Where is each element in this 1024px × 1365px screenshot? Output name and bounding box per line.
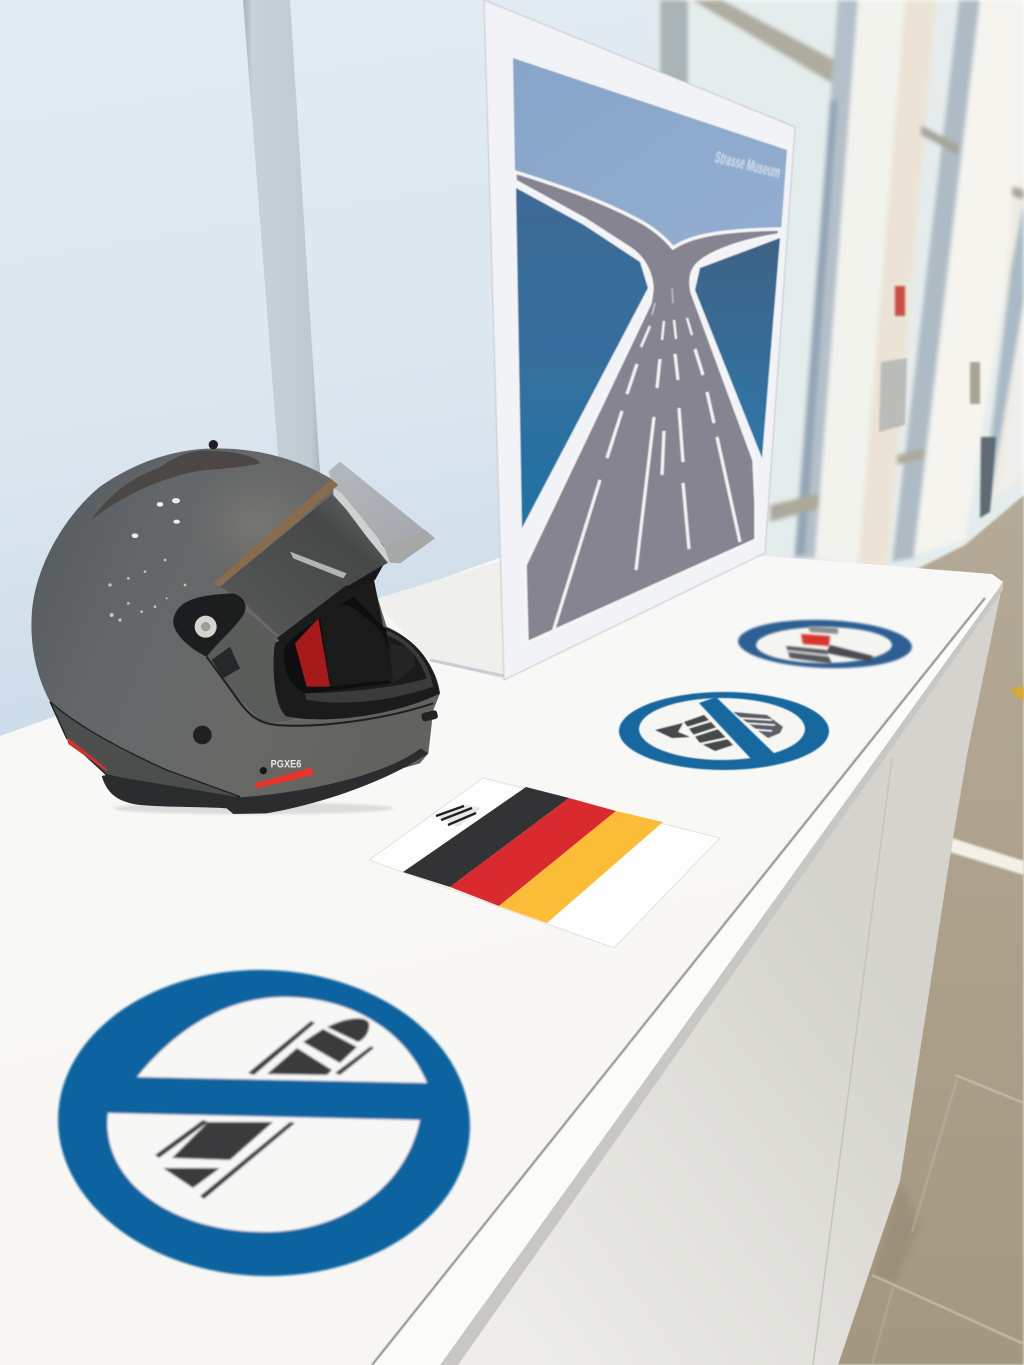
poster lane markings (553, 288, 740, 632)
helmet label: PGXE6 (271, 758, 301, 770)
helmet red lining (295, 618, 330, 687)
helmet label (254, 758, 313, 788)
helmet side vent (421, 710, 438, 722)
flag card logo (436, 804, 481, 827)
background: metal pillar (243, 0, 323, 520)
visor upper flap (328, 462, 435, 545)
sign upper icon (248, 1018, 374, 1075)
helmet black lining (320, 605, 390, 687)
poster right water (695, 238, 780, 458)
helmet shell (31, 448, 440, 807)
yellow stripe (499, 811, 663, 923)
helmet top vent (92, 451, 260, 519)
poster left water (516, 188, 648, 528)
middle sign bar (699, 697, 780, 762)
red stripe (450, 798, 616, 906)
table top (0, 556, 1003, 1365)
helmet faceplate (207, 612, 293, 723)
black stripe (403, 787, 569, 887)
large round sign (53, 963, 475, 1283)
flag card (369, 778, 720, 948)
poster caption: Strasse Museum (713, 147, 782, 182)
helmet shell highlight (190, 467, 323, 580)
poster: motorway artwork (484, 0, 795, 680)
helmet highlights (108, 498, 186, 622)
background: wall fittings (879, 286, 996, 518)
poster frame (484, 0, 795, 680)
helmet base (102, 748, 428, 814)
helmet shadow (113, 802, 393, 814)
far round sign (737, 617, 913, 671)
helmet rear reflector (67, 737, 107, 772)
helmet chin groove (207, 657, 433, 726)
poster base shadow (372, 560, 504, 680)
helmet screw (193, 726, 212, 744)
visor tan strip (213, 479, 338, 587)
background: corridor windows and columns (655, 0, 1024, 580)
helmet visor (213, 462, 435, 643)
helmet (31, 440, 440, 814)
table front side (450, 582, 1003, 1365)
sign upper white area (137, 997, 427, 1083)
visor smoked glass (220, 493, 390, 637)
sign ring (53, 963, 475, 1283)
sign lower white area (107, 1113, 420, 1232)
middle sign icon (655, 712, 783, 751)
helmet eye port (274, 577, 440, 719)
floor (820, 495, 1024, 1365)
sign lower icon (155, 1120, 295, 1199)
poster road (515, 172, 780, 643)
visor silver band (333, 487, 395, 563)
helmet chin rim (305, 630, 433, 703)
middle round sign (619, 692, 829, 770)
background: left wall (0, 0, 680, 760)
helmet lower band (50, 702, 240, 799)
visor lower strip (383, 530, 435, 563)
poster sky (513, 58, 787, 252)
helmet visor pivot (173, 593, 246, 678)
far sign icon (786, 626, 873, 664)
